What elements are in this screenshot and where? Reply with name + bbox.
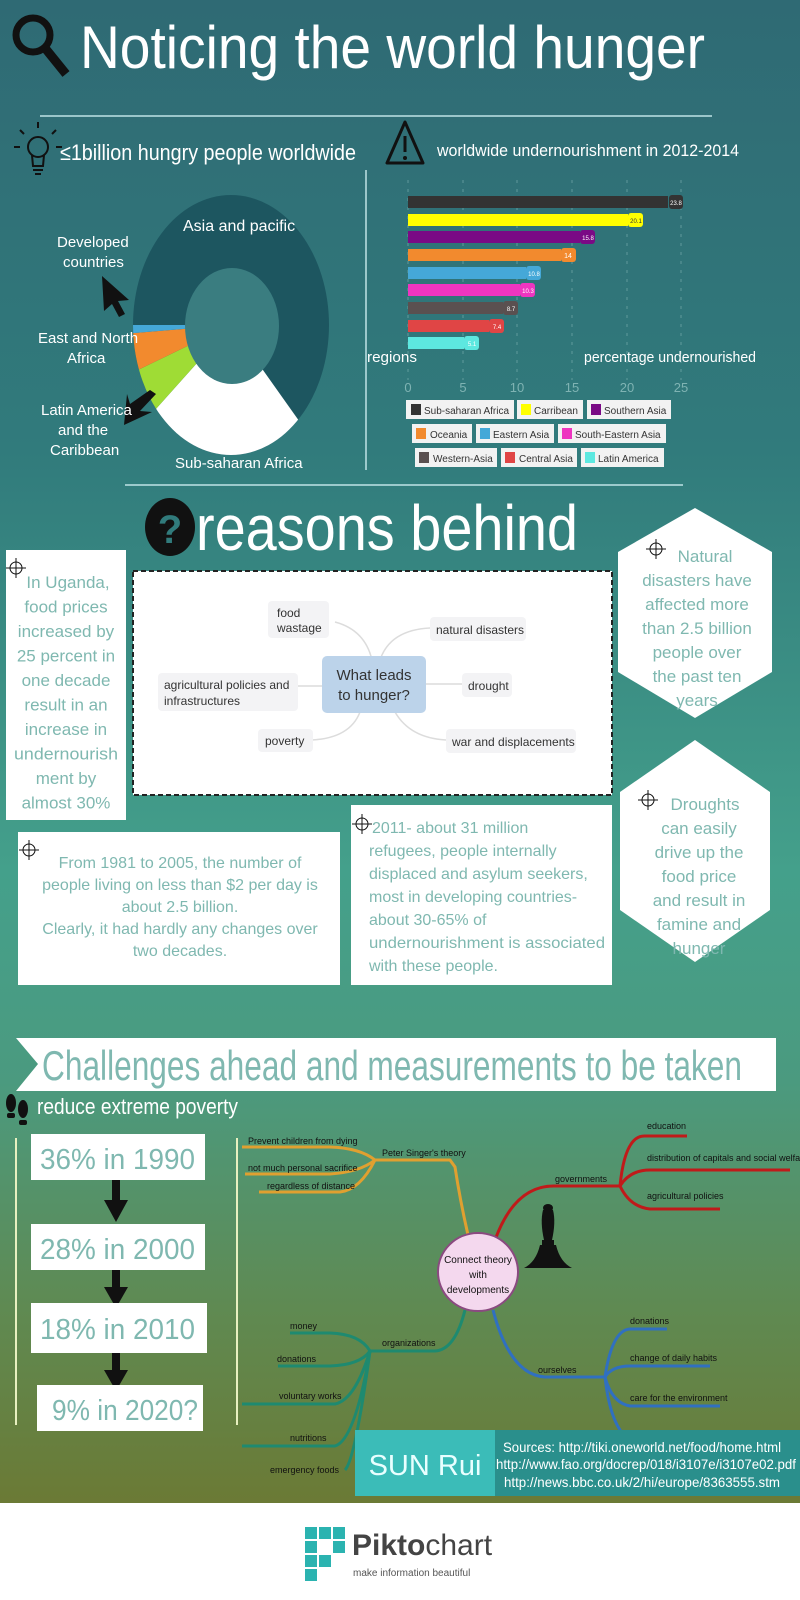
panel: 2011 refugees: about 30-65% of bbox=[369, 912, 487, 929]
mind map: connect theory with developments: donations bbox=[630, 1316, 670, 1326]
bar chart: 20 bbox=[620, 380, 634, 395]
footer: piktochart logo bbox=[305, 1527, 493, 1581]
mind map: connect theory with developments: Peter Singer's theory bbox=[382, 1148, 466, 1158]
icon: cursor arrow 1 bbox=[102, 276, 129, 317]
panel: author bbox=[355, 1430, 495, 1496]
bar chart: 8.7 bbox=[507, 307, 516, 313]
icon: question mark bbox=[145, 498, 195, 556]
panel: 1981 to 2005: From 1981 to 2005, the number of bbox=[59, 855, 302, 872]
mind map: connect theory with developments: regardless of distance bbox=[267, 1181, 355, 1191]
bar chart: 0 bbox=[404, 380, 412, 395]
mind map: connect theory with developments: with bbox=[468, 1270, 487, 1281]
panel: 1981 to 2005: people living on less than $2 per day is bbox=[42, 877, 318, 894]
panel: sources: http://news.bbc.co.uk/2/hi/europe/8363555.stm bbox=[504, 1474, 780, 1490]
legend bbox=[406, 400, 671, 467]
bar chart: 23.8 bbox=[670, 201, 682, 207]
panel: mind map what leads to hunger: agricultural policies and bbox=[164, 678, 289, 692]
panel: 1981 to 2005 bbox=[18, 832, 340, 985]
panel: hexagon droughts: famine and bbox=[657, 915, 741, 934]
icon: question mark: ? bbox=[158, 508, 182, 552]
panel: hexagon natural disasters: than 2.5 billion bbox=[642, 619, 752, 638]
mind map: connect theory with developments: not much personal sacrifice bbox=[248, 1163, 358, 1173]
panel: 1981 to 2005: about 2.5 billion. bbox=[122, 899, 238, 916]
bar chart: 15 bbox=[565, 380, 579, 395]
mind map: connect theory with developments: governments bbox=[555, 1174, 608, 1184]
mind map: connect theory with developments: donations bbox=[277, 1354, 317, 1364]
heading: reasons behind: reasons behind bbox=[196, 492, 578, 564]
bar chart: 10.8 bbox=[528, 272, 540, 278]
footer: piktochart logo: make information beautiful bbox=[353, 1568, 470, 1579]
mind map: connect theory with developments: change of daily habits bbox=[630, 1353, 718, 1363]
icon: light bulb bbox=[14, 122, 62, 174]
icon: warning triangle bbox=[387, 122, 423, 163]
panel: sources bbox=[495, 1430, 800, 1496]
panel: mind map what leads to hunger: war and displacements bbox=[451, 735, 575, 749]
panel: hexagon natural disasters: affected more bbox=[645, 595, 749, 614]
panel: mind map what leads to hunger: What leads bbox=[336, 667, 412, 684]
label: Sub-saharan Africa: Sub-saharan Africa bbox=[175, 455, 303, 472]
panel: hexagon natural disasters bbox=[618, 508, 772, 718]
panel: hexagon natural disasters: people over bbox=[653, 643, 742, 662]
panel: 1981 to 2005: Clearly, it had hardly any changes over bbox=[42, 921, 318, 938]
panel: hexagon droughts: can easily bbox=[661, 819, 737, 838]
label: Latin America: Caribbean bbox=[50, 442, 119, 459]
mind map: connect theory with developments: voluntary works bbox=[279, 1391, 342, 1401]
poverty timeline bbox=[31, 1134, 207, 1431]
panel: Uganda: food prices bbox=[24, 598, 108, 616]
subtitle: undernourishment: worldwide undernourishment in 2012-2014 bbox=[436, 141, 739, 160]
poverty timeline: 9% in 2020? bbox=[52, 1395, 198, 1427]
panel: hexagon droughts: drive up the bbox=[655, 843, 743, 862]
bar chart: 5.1 bbox=[468, 342, 477, 348]
mind map: connect theory with developments: organizations bbox=[382, 1338, 436, 1348]
panel: mind map what leads to hunger: to hunger? bbox=[338, 687, 410, 704]
panel: Uganda: In Uganda, bbox=[26, 573, 110, 592]
panel: 2011 refugees: most in developing countries- bbox=[369, 889, 577, 906]
bar chart: 20.1 bbox=[630, 219, 642, 225]
mind map: connect theory with developments: nutritions bbox=[290, 1433, 327, 1443]
label: Asia and pacific: Asia and pacific bbox=[183, 218, 295, 235]
label: Developed countries: countries bbox=[63, 254, 124, 271]
panel: Uganda: one decade bbox=[22, 671, 110, 690]
legend: South-Eastern Asia bbox=[575, 430, 661, 441]
bar chart: percentage undernourished bbox=[584, 349, 756, 366]
mind map: connect theory with developments: agricultural policies bbox=[647, 1191, 724, 1201]
bar chart bbox=[367, 180, 756, 467]
bar chart: 5 bbox=[459, 380, 467, 395]
bar chart: 10.3 bbox=[522, 289, 534, 295]
panel: hexagon natural disasters: Natural bbox=[678, 547, 732, 566]
panel: Uganda: 25 percent in bbox=[17, 646, 115, 666]
panel: Uganda: increased by bbox=[18, 622, 115, 641]
panel: 2011 refugees: undernourishment is associated bbox=[369, 935, 605, 952]
panel: hexagon natural disasters: years bbox=[676, 691, 718, 710]
panel: mind map what leads to hunger bbox=[133, 571, 612, 795]
mind map: connect theory with developments: mindful eating bbox=[630, 1431, 686, 1441]
icon: bell bbox=[524, 1204, 572, 1268]
arrow bbox=[104, 1180, 128, 1222]
mind map: connect theory with developments: money bbox=[290, 1321, 318, 1331]
panel: mind map what leads to hunger: poverty bbox=[265, 734, 304, 748]
panel: hexagon droughts: hunger bbox=[673, 939, 726, 958]
poverty timeline: 28% in 2000 bbox=[40, 1234, 195, 1266]
bar chart: 14 bbox=[564, 253, 572, 260]
legend: Eastern Asia bbox=[493, 430, 550, 441]
panel: mind map what leads to hunger: natural disasters bbox=[436, 623, 524, 637]
poverty timeline: 36% in 1990 bbox=[40, 1144, 195, 1176]
mind map: connect theory with developments: Prevent children from dying bbox=[248, 1136, 358, 1146]
bar chart: 10 bbox=[510, 380, 524, 395]
bar chart: 7.4 bbox=[493, 325, 502, 331]
label: Latin America: Latin America bbox=[41, 402, 133, 419]
panel: 2011 refugees bbox=[351, 805, 612, 985]
panel: 2011 refugees: refugees, people internally bbox=[369, 843, 557, 860]
subheading: reduce extreme poverty: reduce extreme poverty bbox=[37, 1094, 238, 1119]
panel: 2011 refugees: with these people. bbox=[368, 958, 498, 975]
panel: hexagon droughts: Droughts bbox=[671, 795, 739, 814]
label: East and North Africa: East and North bbox=[38, 330, 138, 347]
panel: 2011 refugees: displaced and asylum seekers, bbox=[369, 866, 588, 883]
legend: Latin America bbox=[598, 454, 659, 465]
panel: hexagon droughts bbox=[620, 740, 770, 962]
legend: Southern Asia bbox=[604, 406, 667, 417]
label: Developed countries: Developed bbox=[57, 234, 129, 251]
mind map: connect theory with developments: emergency foods bbox=[270, 1465, 340, 1475]
panel: Uganda: result in an bbox=[24, 696, 108, 714]
panel: mind map what leads to hunger: wastage bbox=[276, 621, 322, 635]
bar chart: 25 bbox=[674, 380, 688, 395]
footer: piktochart logo: Piktochart bbox=[352, 1529, 493, 1562]
legend: Central Asia bbox=[519, 454, 573, 465]
panel: mind map what leads to hunger: drought bbox=[468, 679, 509, 693]
panel: Uganda: increase in bbox=[25, 720, 107, 739]
panel: Uganda: undernourish bbox=[14, 744, 118, 764]
legend: Western-Asia bbox=[433, 454, 493, 465]
panel: 1981 to 2005: two decades. bbox=[133, 943, 227, 960]
panel: hexagon natural disasters: the past ten bbox=[653, 667, 741, 686]
legend: Carribean bbox=[534, 406, 578, 417]
mind map: connect theory with developments: education bbox=[647, 1121, 686, 1131]
icon: footprints bbox=[6, 1094, 28, 1125]
legend: Oceania bbox=[430, 430, 468, 441]
panel: hexagon droughts: food price bbox=[662, 867, 736, 886]
mind map: connect theory with developments: care for the environment bbox=[630, 1393, 728, 1403]
title: Noticing the world hunger bbox=[80, 14, 705, 81]
mind map: connect theory with developments: ourselves bbox=[538, 1365, 577, 1375]
icon: magnifier bbox=[16, 18, 66, 74]
bar chart: 15.8 bbox=[582, 236, 594, 242]
axis labels: regions bbox=[367, 349, 417, 366]
panel: hexagon droughts: and result in bbox=[653, 891, 745, 910]
panel: 2011 refugees: 2011- about 31 million bbox=[372, 820, 528, 837]
panel: author: SUN Rui bbox=[369, 1450, 481, 1482]
panel: mind map what leads to hunger: food bbox=[277, 606, 300, 620]
mind map: connect theory with developments bbox=[242, 1121, 800, 1475]
panel: Uganda: ment by bbox=[36, 769, 97, 788]
panel: mind map what leads to hunger: infrastructures bbox=[164, 694, 240, 708]
label: East and North Africa: Africa bbox=[67, 350, 106, 367]
subtitle: hungry people: ≤1billion hungry people worldwide bbox=[60, 140, 356, 165]
icon: cursor arrow 2 bbox=[124, 390, 156, 425]
panel: Uganda: almost 30% bbox=[22, 794, 110, 812]
panel: hexagon natural disasters: disasters have bbox=[642, 571, 752, 590]
poverty timeline: 18% in 2010 bbox=[40, 1314, 195, 1346]
panel: sources: Sources: http://tiki.oneworld.net/food/home.html bbox=[503, 1439, 781, 1455]
mind map: connect theory with developments: developments bbox=[447, 1285, 509, 1296]
legend: Sub-saharan Africa bbox=[424, 406, 509, 417]
panel: Uganda bbox=[6, 550, 126, 820]
label: Latin America: and the bbox=[58, 422, 108, 439]
donut chart bbox=[39, 195, 329, 468]
mind map: connect theory with developments: Connect theory bbox=[444, 1255, 512, 1266]
